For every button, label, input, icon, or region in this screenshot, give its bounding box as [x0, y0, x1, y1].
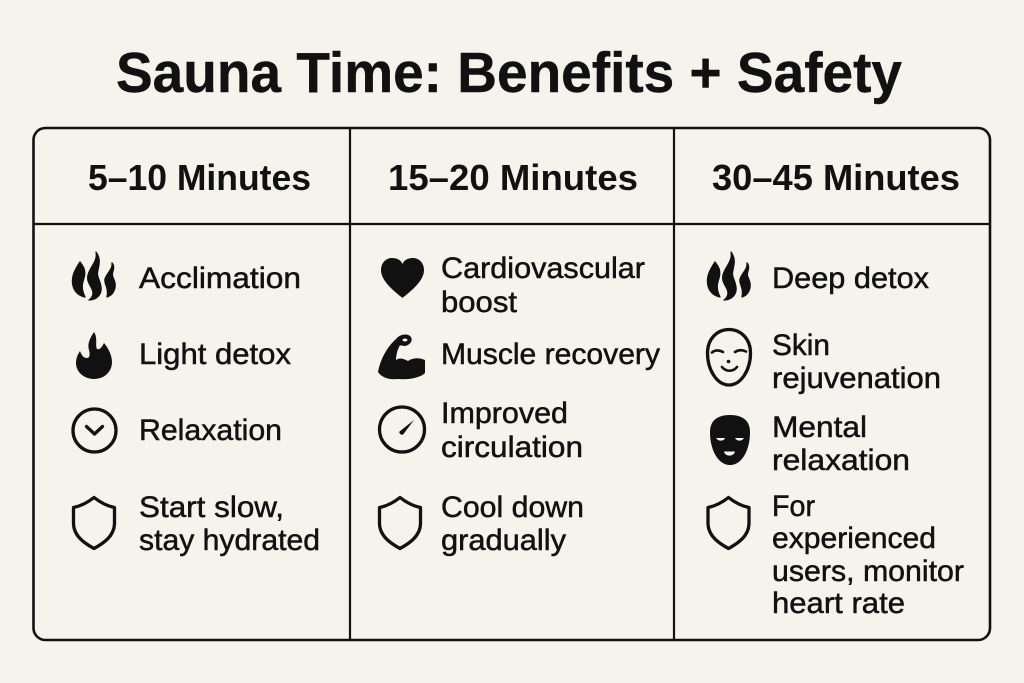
item: cool down — [380, 491, 584, 557]
panel: 30–45 minutes — [707, 157, 964, 620]
item: acclimation — [72, 252, 301, 300]
icon: steam — [707, 252, 750, 300]
icon: smiling face — [708, 330, 750, 385]
label — [441, 397, 583, 464]
label — [772, 411, 910, 477]
item: mental relaxation — [710, 411, 910, 477]
label: Mental — [772, 411, 867, 444]
icon: flexed arm — [378, 335, 425, 379]
item: relaxation — [73, 409, 282, 452]
icon: face mask — [710, 415, 750, 465]
item: start slow — [74, 491, 320, 557]
label — [772, 329, 941, 395]
label: Improved — [441, 397, 568, 430]
label: circulation — [441, 431, 583, 464]
label: Cool down — [441, 491, 584, 524]
label: users, monitor — [772, 555, 964, 588]
label: Cardiovascular — [441, 252, 645, 285]
label: Start slow, — [139, 491, 284, 524]
heading: 15–20 minutes: 15–20 Minutes — [388, 157, 638, 198]
icon: shield — [708, 498, 749, 548]
label — [441, 252, 645, 319]
title: Sauna Time: Benefits + Safety — [116, 41, 902, 105]
label: gradually — [441, 524, 566, 557]
label: relaxation — [772, 444, 910, 477]
panel: 5–10 minutes — [72, 157, 320, 557]
item: muscle recovery — [378, 335, 660, 379]
icon: steam — [72, 252, 115, 300]
label: heart rate — [772, 587, 905, 620]
label: Relaxation — [139, 414, 282, 447]
label: Light detox — [139, 338, 291, 371]
label: Deep detox — [772, 262, 929, 295]
item: improved circulation — [380, 397, 583, 464]
panel: 15–20 minutes — [378, 157, 660, 557]
label: Muscle recovery — [441, 338, 660, 371]
heading: 30–45 minutes: 30–45 Minutes — [712, 157, 960, 198]
label: boost — [441, 286, 518, 319]
icon: flame — [76, 332, 112, 379]
item: for experienced users — [708, 490, 964, 620]
icon: heart — [381, 258, 424, 298]
heading: 5–10 minutes: 5–10 Minutes — [88, 157, 311, 198]
label: stay hydrated — [139, 524, 320, 557]
icon: shield — [74, 498, 114, 548]
table frame — [34, 128, 990, 640]
item: deep detox — [707, 252, 929, 300]
label — [139, 491, 320, 557]
label: Skin — [772, 329, 830, 362]
item: skin rejuvenation — [708, 329, 941, 395]
icon: gauge — [380, 407, 424, 452]
label: rejuvenation — [772, 362, 941, 395]
icon: shield — [380, 498, 420, 548]
label: Acclimation — [139, 262, 301, 295]
label: experienced — [772, 522, 936, 555]
label — [441, 491, 584, 557]
label: For — [772, 490, 815, 523]
item: light detox — [76, 332, 291, 379]
item: cardiovascular boost — [381, 252, 645, 319]
label — [772, 490, 964, 620]
icon: clock with chevron — [73, 409, 116, 452]
